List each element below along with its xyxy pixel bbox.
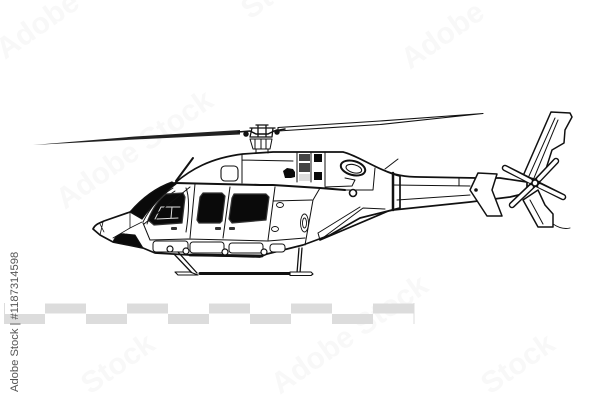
louvres [299,154,310,181]
rear antenna [385,159,398,169]
front strut [174,252,197,273]
left rotor blade [33,130,240,145]
chin window [113,234,143,248]
rotor mast [250,139,272,153]
nose panel [100,213,142,238]
watermarks: Stock [475,327,561,401]
windscreen [130,182,176,219]
fuselage outline [93,152,400,257]
tail rotor [505,161,563,205]
watermarks: Stock [75,327,161,401]
cabin door window 2 [229,194,269,223]
right rotor blade [278,114,483,131]
watermarks: Adobe Stock [50,83,219,216]
watermarks: Adobe Stock [265,268,434,401]
cabin door window 1 [197,193,225,223]
forward roof window [221,166,238,181]
skid ends [175,272,313,276]
roof deck line [175,183,345,190]
scale bar [4,303,414,324]
door frames [143,184,320,245]
antenna [176,158,193,181]
windscreen frame [143,188,175,224]
exhaust vent [350,190,356,196]
cockpit window [148,193,185,225]
tail boom details [392,173,394,210]
stabilizer fitting [474,188,478,192]
engine cowling panels [242,152,375,190]
rear engine fairing [318,207,385,240]
horizontal stabilizer [470,173,502,216]
lower fuselage bar [190,255,262,256]
stock id label: Adobe Stock | #1187314598 [9,252,21,392]
helicopter [33,112,572,276]
tail fin [523,112,572,228]
rear strut [297,248,302,273]
engine hatches [283,154,322,180]
lower sponson fairings [153,241,285,253]
engine intake [339,158,367,178]
door handles [171,227,235,230]
small hatches and oval door [272,202,308,232]
skid [200,272,290,275]
landing gear fittings [167,246,267,255]
tail boom [320,170,527,240]
rotor hub [238,125,285,137]
cockpit window instrument outline [155,207,180,219]
